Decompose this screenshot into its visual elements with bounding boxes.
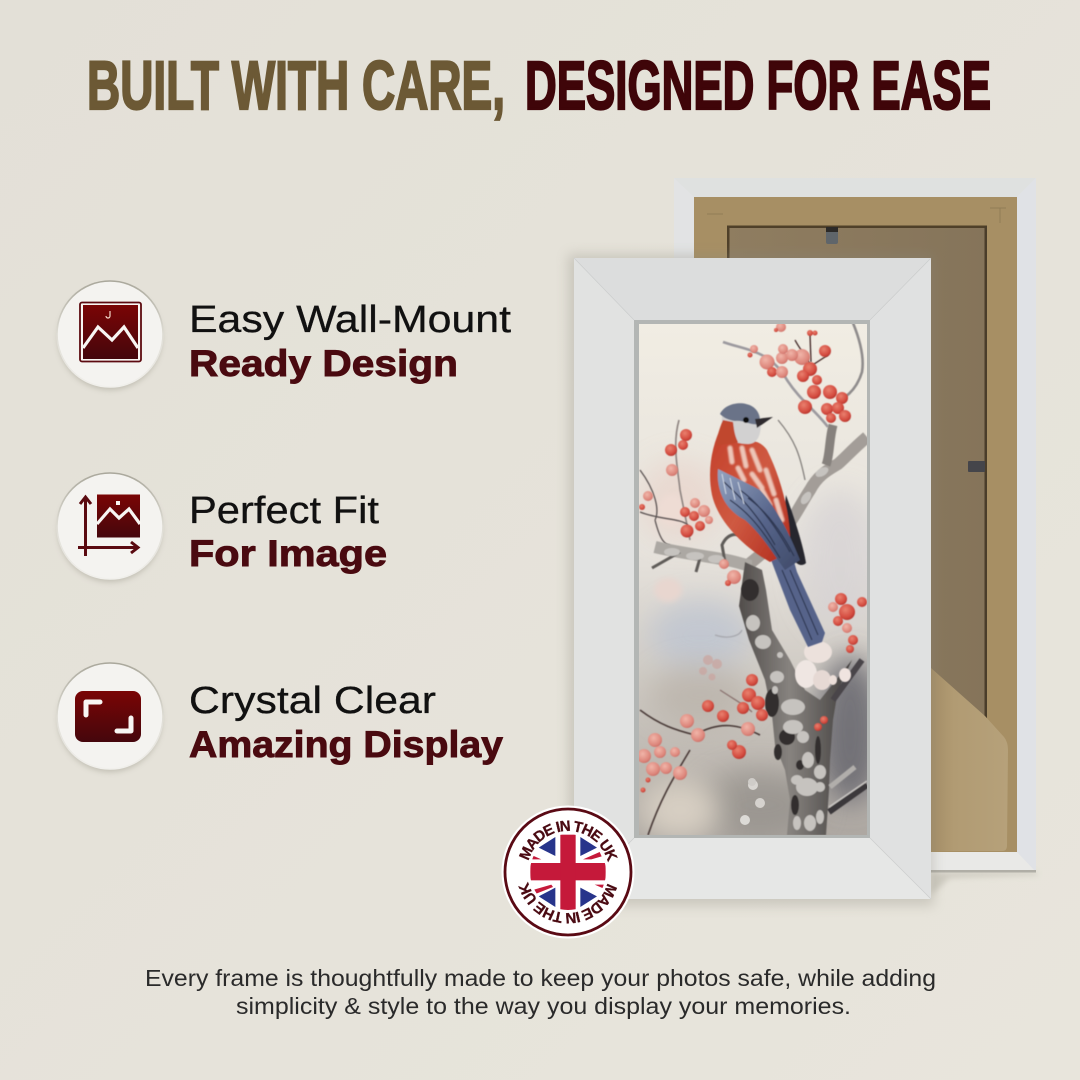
feature text xyxy=(189,680,503,765)
badge text xyxy=(518,820,618,924)
frame moulding xyxy=(574,258,931,899)
icon: size arrows and picture xyxy=(57,473,163,582)
head xyxy=(722,416,762,445)
body xyxy=(710,425,790,562)
feature: perfect fit xyxy=(57,473,387,582)
berries: left cluster xyxy=(639,429,741,586)
badge text: MADE IN THE UK xyxy=(518,882,618,924)
tail feathers xyxy=(771,558,826,648)
feature text: Perfect Fit xyxy=(189,490,379,532)
footer text xyxy=(145,965,936,1019)
hanger clips xyxy=(826,227,985,472)
feature text xyxy=(189,299,511,384)
title: BUILT WITH CARE, xyxy=(87,47,505,124)
berries: right cluster xyxy=(814,593,867,731)
feature: crystal clear xyxy=(57,663,503,772)
watercolour washes xyxy=(640,460,884,840)
kraft backing board xyxy=(694,197,1017,852)
front frame xyxy=(568,254,934,906)
easel stand xyxy=(931,668,1008,851)
feature: easy wall-mount xyxy=(57,281,511,390)
footer text: Every frame is thoughtfully made to keep your photos safe, while adding xyxy=(145,965,936,991)
feature text: Amazing Display xyxy=(189,724,503,765)
icon: expand screen xyxy=(57,663,163,772)
title xyxy=(87,47,991,124)
bird xyxy=(710,403,825,647)
badge: made in the UK xyxy=(502,806,634,938)
back of frame xyxy=(674,178,1037,895)
pale blossoms xyxy=(795,641,851,690)
frame back moulding xyxy=(674,178,1036,872)
feature text: For Image xyxy=(189,533,387,574)
footer text: simplicity & style to the way you display your memories. xyxy=(236,993,851,1019)
berries: lower cluster xyxy=(637,655,768,792)
thin twigs xyxy=(640,323,863,835)
feature text: Easy Wall-Mount xyxy=(189,299,511,341)
eye xyxy=(743,417,749,423)
badge text: MADE IN THE UK xyxy=(518,820,618,862)
feature text: Ready Design xyxy=(189,343,458,384)
icon: wall-mount picture xyxy=(57,281,163,390)
wing xyxy=(718,469,800,570)
beak xyxy=(755,417,773,428)
framed painting: bird on berry branch xyxy=(637,322,884,840)
dark rear feather xyxy=(785,495,806,565)
feature text: Crystal Clear xyxy=(189,680,436,722)
feature text xyxy=(189,490,387,574)
berries: upper cluster xyxy=(748,322,851,423)
bark lumps xyxy=(664,465,830,831)
tree trunk and branches xyxy=(652,425,867,835)
union flag xyxy=(530,835,606,910)
